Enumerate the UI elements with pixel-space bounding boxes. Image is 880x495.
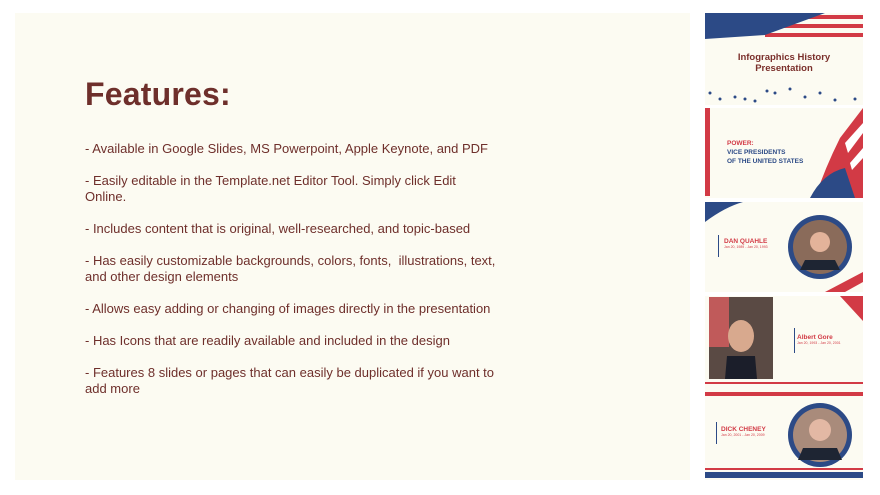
panel: main features xyxy=(15,13,690,480)
thumbnail: slide 2 xyxy=(705,108,863,198)
thumbnail: slide 1: Presentation xyxy=(755,63,813,74)
text block: features list: - Available in Google Slides, MS Powerpoint, Apple Keynote, and PDF xyxy=(85,141,488,156)
thumbnail: slide 2: OF THE UNITED STATES xyxy=(727,158,803,165)
thumbnail: slide 5 xyxy=(705,380,863,480)
text block: features list: add more xyxy=(85,381,140,396)
text block: features list: - Easily editable in the Template.net Editor Tool. Simply click Edit xyxy=(85,173,456,188)
text block: features list xyxy=(85,141,495,396)
thumbnail: slide 1: Infographics History xyxy=(738,52,830,63)
thumbnail: slide 2: POWER: xyxy=(727,140,754,147)
thumbnail: slide 5: Jan 20, 2001 - Jan 20, 2009 xyxy=(721,433,765,437)
thumbnail: slide 1 xyxy=(705,13,863,105)
thumbnail: slide 5: DICK CHENEY xyxy=(721,426,766,433)
thumbnail: slide 4 xyxy=(705,296,863,386)
thumbnail: slide 3: Jan 20, 1989 - Jan 20, 1993 xyxy=(724,245,768,249)
thumbnail: slide 2: VICE PRESIDENTS xyxy=(727,149,786,156)
text block: features list: - Has easily customizable backgrounds, colors, fonts, illustrations, text, xyxy=(85,253,495,268)
thumbnail: slide 3 xyxy=(705,202,863,292)
thumbnail: slide 4: Albert Gore xyxy=(797,334,833,341)
title: Features: xyxy=(85,76,231,112)
text block: features list: Online. xyxy=(85,189,126,204)
text block: features list: - Allows easy adding or changing of images directly in the presentation xyxy=(85,301,490,316)
thumbnail: slide 4: Jan 20, 1993 - Jan 20, 2001 xyxy=(797,341,841,345)
thumbnail: slide 3: DAN QUAHLE xyxy=(724,238,767,245)
text block: features list: - Features 8 slides or pages that can easily be duplicated if you want to xyxy=(85,365,494,380)
text block: features list: - Has Icons that are readily available and included in the design xyxy=(85,333,450,348)
text block: features list: and other design elements xyxy=(85,269,238,284)
text block: features list: - Includes content that is original, well-researched, and topic-based xyxy=(85,221,470,236)
